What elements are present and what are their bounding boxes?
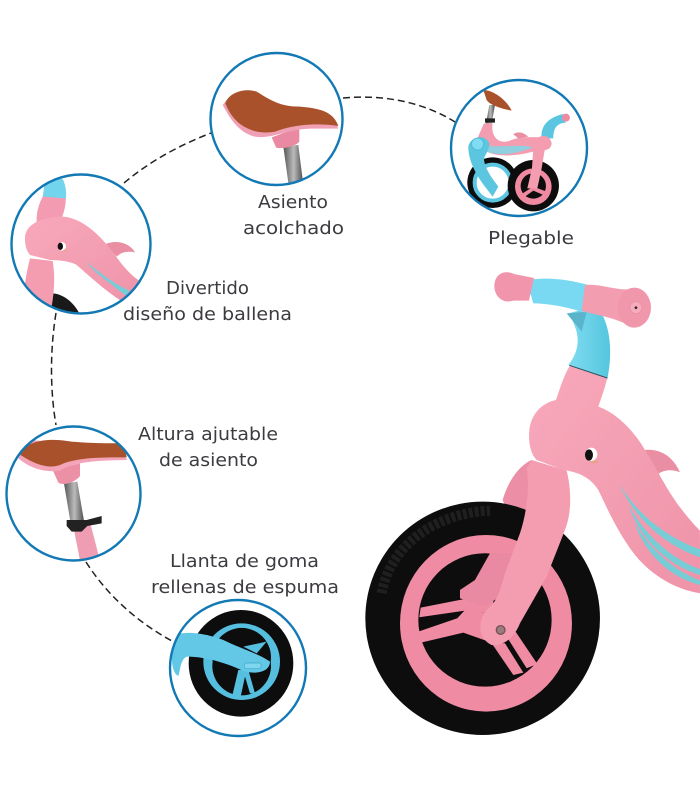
panel: seat callout xyxy=(210,53,342,190)
photo: padded saddle xyxy=(223,90,338,190)
fork axle bolt xyxy=(496,626,505,634)
label: Llanta de goma rellenas de espuma: Llanta de goma xyxy=(170,552,319,572)
circle border xyxy=(451,80,587,216)
main image: pink whale balance bike xyxy=(365,272,700,735)
grip cap dot xyxy=(635,306,637,309)
dashed connector: whale to seat height xyxy=(52,313,56,425)
photo: dolphin head xyxy=(23,177,143,315)
dashed connector: whale to seat xyxy=(124,133,211,183)
label: Asiento acolchado: acolchado xyxy=(243,219,344,239)
dolphin eye xyxy=(585,448,598,463)
label: Asiento acolchado: Asiento xyxy=(258,193,328,213)
circle border xyxy=(210,53,342,185)
dashed connector: seat to folding xyxy=(343,97,455,122)
front tire xyxy=(365,502,600,735)
label: Llanta de goma rellenas de espuma xyxy=(151,552,339,598)
panel: seat height callout xyxy=(6,426,140,562)
wheel spokes xyxy=(418,593,537,675)
photo: seat post and clamp xyxy=(17,440,127,562)
circle border xyxy=(12,174,150,314)
front fork xyxy=(480,460,570,645)
right grip xyxy=(582,285,630,326)
label: Llanta de goma rellenas de espuma: rellenas de espuma xyxy=(151,578,339,598)
handlebar centre xyxy=(527,279,588,313)
panel: whale design callout xyxy=(12,174,150,315)
dolphin body xyxy=(529,365,700,593)
dashed connector: seat height to wheel xyxy=(86,562,172,641)
label: Divertido diseño de ballena: Divertido xyxy=(166,279,249,299)
label: Divertido diseño de ballena: diseño de ballena xyxy=(123,305,292,325)
rear fork lower xyxy=(460,553,513,607)
circle border xyxy=(170,600,306,736)
teal body stripes xyxy=(618,483,700,585)
stem shadow detail xyxy=(567,312,587,332)
rear fork leg xyxy=(503,460,537,527)
grip end cap xyxy=(618,288,651,328)
circle border xyxy=(6,426,140,560)
panel: folding callout xyxy=(451,80,587,216)
label: Altura ajutable de asiento: de asiento xyxy=(159,451,258,471)
teal stem xyxy=(568,307,610,379)
front rim xyxy=(400,535,572,712)
tire tread xyxy=(382,511,490,593)
photo: folded bike xyxy=(467,90,570,211)
panel: foam tire callout xyxy=(170,600,306,736)
label: Divertido diseño de ballena xyxy=(123,279,292,325)
label: Altura ajutable de asiento xyxy=(138,425,278,471)
stem join line xyxy=(569,365,607,378)
label: Asiento acolchado xyxy=(243,193,344,239)
dolphin fin xyxy=(645,450,680,478)
label: Altura ajutable de asiento: Altura ajutable xyxy=(138,425,278,445)
label: Plegable: Plegable xyxy=(488,229,574,249)
left grip xyxy=(494,272,534,302)
grip cap hole xyxy=(630,302,642,314)
photo: teal wheel xyxy=(172,610,293,717)
